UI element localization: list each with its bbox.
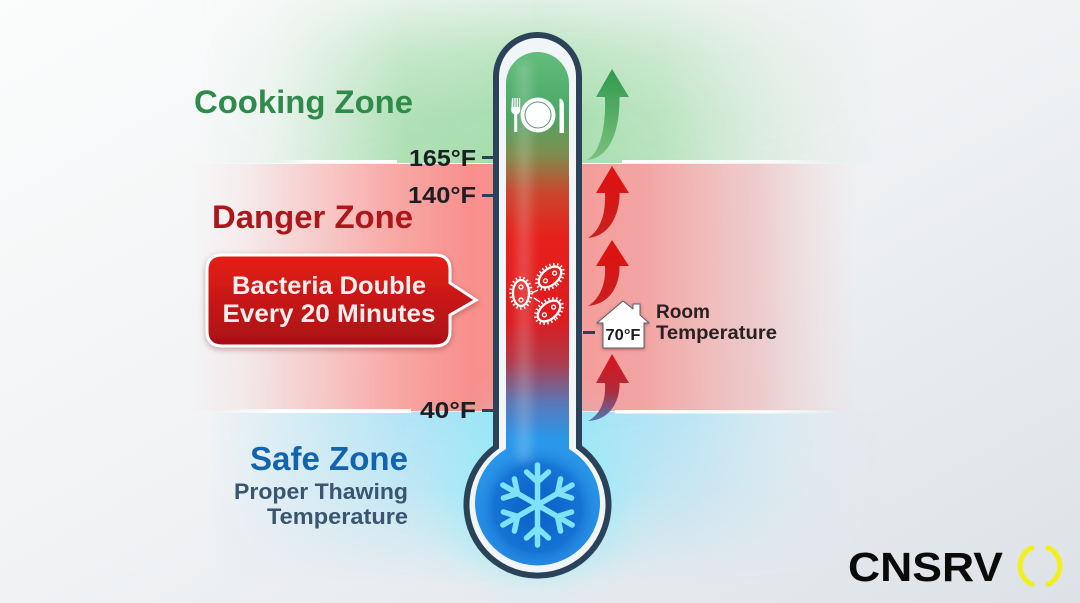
icon: house 70°F: 70°F <box>606 327 640 344</box>
tick: 140°F: 140°F <box>408 182 476 208</box>
safe zone band <box>234 412 818 571</box>
icon: snowflake <box>497 465 578 545</box>
logo: CNSRV: CNSRV <box>848 544 1004 590</box>
heading: Safe Zone: Safe Zone <box>250 440 408 477</box>
text: Proper Thawing Temperature: Proper Thawing <box>234 479 408 504</box>
text: Proper Thawing Temperature: Temperature <box>267 504 408 529</box>
tick: 165°F: 165°F <box>409 145 476 171</box>
callout: bacteria double <box>207 255 476 346</box>
label: room temperature <box>656 302 777 344</box>
thermometer outline <box>466 35 608 576</box>
tick: 40°F <box>420 397 493 423</box>
label: room temperature: Room <box>656 302 710 323</box>
icon: bacteria <box>510 259 569 329</box>
bulb fill <box>485 454 590 566</box>
callout: bacteria double: Bacteria Double <box>232 272 426 300</box>
tick: 40°F: 40°F <box>420 397 476 423</box>
danger zone band <box>150 164 900 411</box>
thermometer <box>466 35 608 576</box>
icon: house 70°F <box>597 301 649 348</box>
room temperature tick <box>583 331 595 334</box>
logo mark <box>1020 548 1060 584</box>
arrow: red middle <box>588 240 629 306</box>
arrow: green up <box>587 69 629 160</box>
arrow: red upper <box>588 166 629 238</box>
heading: Danger Zone: Danger Zone <box>212 199 413 235</box>
logo: CNSRV <box>848 544 1060 590</box>
cooking zone band <box>250 0 826 163</box>
bulb glow <box>452 410 622 580</box>
arrow: red to blue <box>588 354 629 421</box>
icon: plate and cutlery <box>511 98 564 133</box>
label: room temperature: Temperature <box>656 323 777 344</box>
heading: Cooking Zone: Cooking Zone <box>194 84 413 120</box>
thermometer tube fill <box>475 52 600 565</box>
text: Proper Thawing Temperature <box>234 479 408 529</box>
callout: bacteria double: Every 20 Minutes <box>222 300 436 328</box>
